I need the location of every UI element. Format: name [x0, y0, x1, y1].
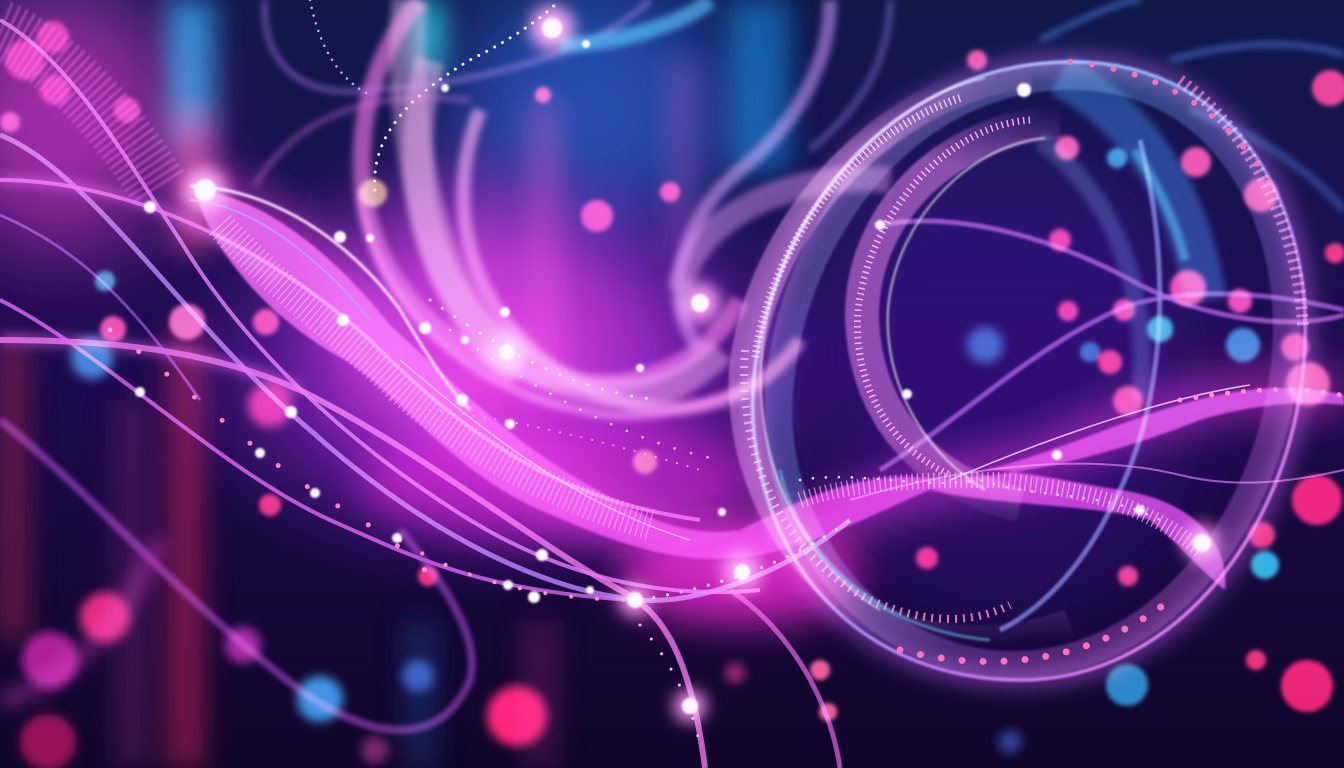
main ribbon: magenta dotted wave — [190, 186, 1344, 590]
background: vertical light bands — [0, 0, 790, 768]
ring ribbon: inner pink loop — [857, 120, 1060, 505]
background: blue and magenta glows — [0, 0, 1210, 625]
sparkles: bright white points — [135, 6, 1220, 722]
back loops: soft swirls behind the centre — [255, 0, 1344, 416]
bokeh: large out-of-focus orbs — [20, 327, 1022, 768]
right strands: thin lines across the ring — [850, 140, 1344, 630]
left strands: flowing purple lines — [0, 20, 850, 768]
ring ribbon: outer transparent loop — [744, 62, 1305, 680]
